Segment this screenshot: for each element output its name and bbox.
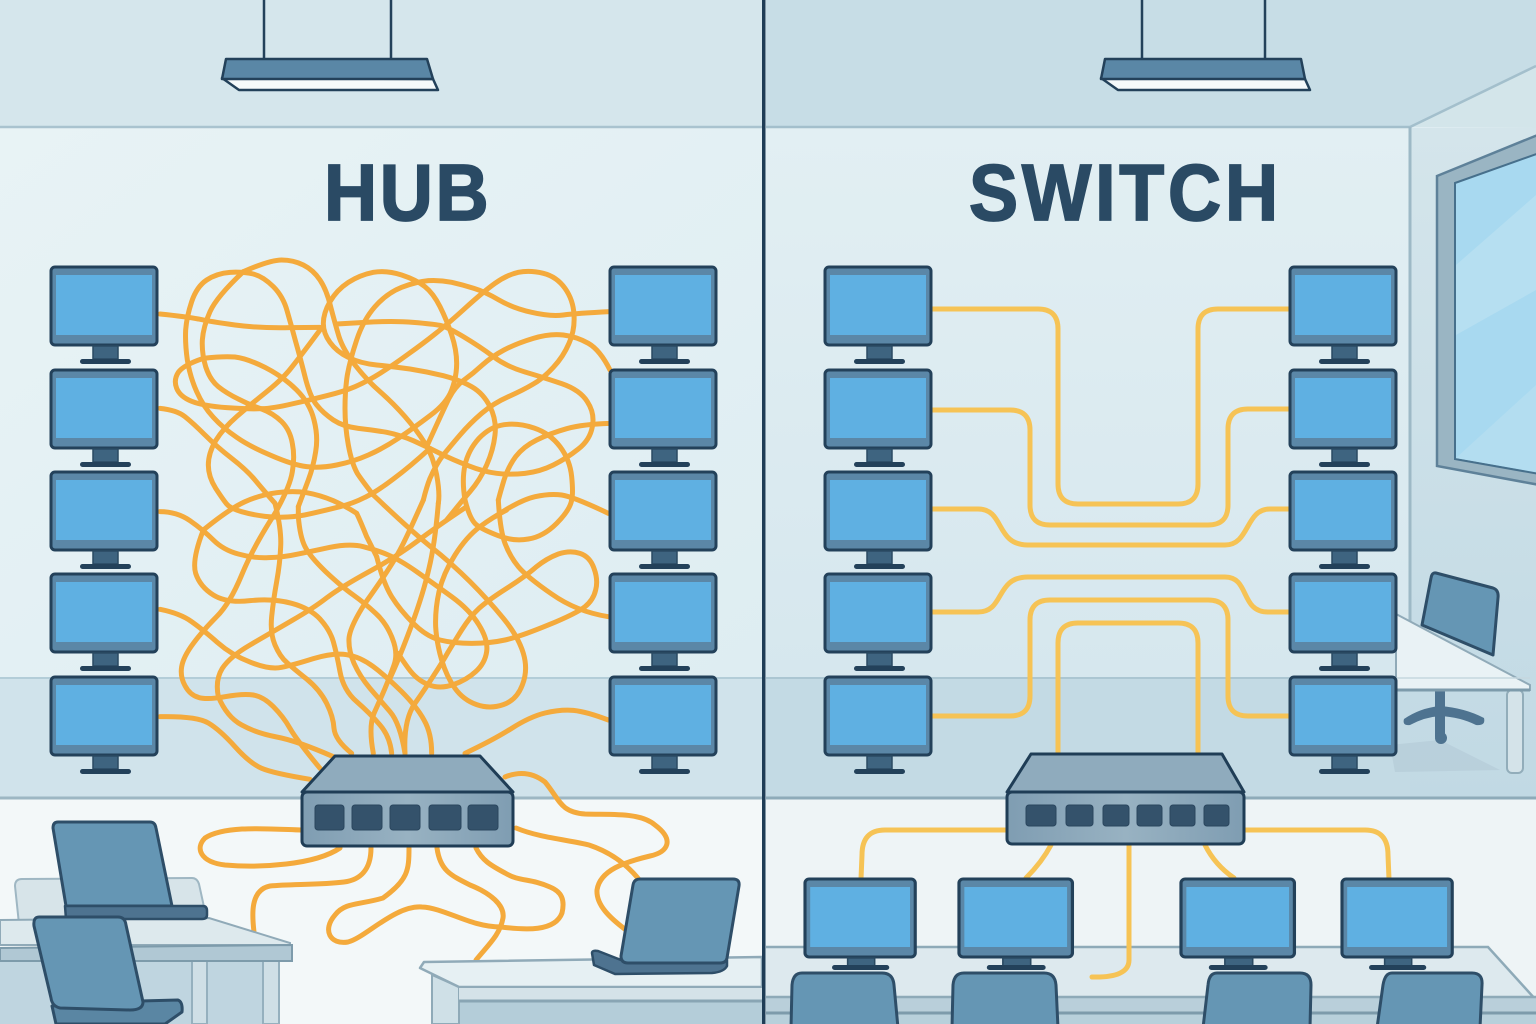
heading: HUB: HUB bbox=[324, 148, 489, 238]
network hub device bbox=[302, 756, 513, 846]
center divider bbox=[762, 0, 766, 1024]
switch monitors left column bbox=[825, 267, 931, 774]
icon: switch ceiling lamp bbox=[1101, 0, 1310, 90]
hub monitors left column bbox=[51, 267, 157, 774]
panel: hub room background bbox=[0, 0, 764, 1024]
bottom desk in switch room bbox=[766, 947, 1536, 1024]
hub ports bbox=[315, 805, 498, 830]
icon: hub ceiling lamp bbox=[222, 0, 438, 90]
icon: open laptop bbox=[592, 879, 739, 974]
heading: SWITCH: SWITCH bbox=[969, 148, 1278, 238]
structured switch cables bbox=[861, 309, 1389, 977]
left desk with laptop and chair bbox=[0, 822, 292, 1024]
desk and chair on the right wall bbox=[1390, 573, 1530, 773]
icon: office chair bbox=[34, 917, 182, 1024]
chair behind the desk bbox=[15, 878, 206, 930]
switch monitors right column bbox=[1290, 267, 1396, 774]
panel: switch room background bbox=[766, 0, 1536, 1024]
icon: window bbox=[1437, 132, 1536, 486]
right desk with laptop bbox=[420, 879, 762, 1024]
icon: open laptop bbox=[53, 822, 207, 919]
switch ports bbox=[1026, 805, 1229, 826]
hub monitors right column bbox=[610, 267, 716, 774]
tangled hub cables, lower part bbox=[160, 495, 608, 779]
tangled hub cables, below the hub bbox=[200, 773, 667, 960]
tangled hub cables, upper part bbox=[160, 260, 610, 530]
bottom row chairs bbox=[791, 973, 1482, 1024]
network switch device bbox=[1007, 754, 1244, 844]
switch monitors bottom row bbox=[805, 879, 1452, 970]
